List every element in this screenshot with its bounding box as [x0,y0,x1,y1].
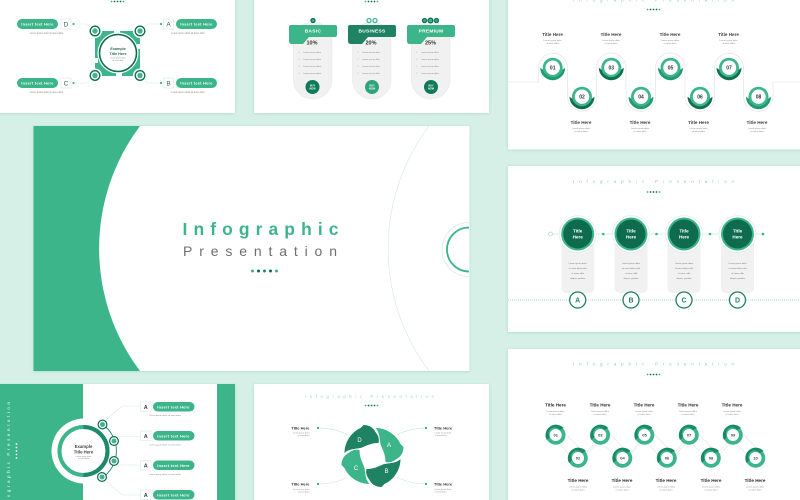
step 01: 01 [550,65,556,71]
step 02: 02 [576,456,581,460]
step C: Here [679,234,690,240]
wave line [508,53,800,111]
pricing card: premium: Lorem ipsum dolor [421,72,439,75]
central octagon diagram: Lorem ipsum dolor [110,56,126,60]
step 07: 07 [726,65,732,71]
list item 1: Insert text Here [157,405,190,409]
wave lower labels: Lorem ipsum dolor [572,127,590,130]
step A [559,216,596,308]
pricing card: business: BUY [369,84,375,88]
wave upper labels [542,32,739,45]
pricing card: basic: Lorem ipsum dolor [303,72,321,75]
label top-left [291,426,310,437]
petal C [342,450,370,484]
item D: Lorem ipsum dolor sit amet dolor [30,32,63,35]
pricing card: business: NOW [369,88,376,90]
wave upper labels: Lorem ipsum dolor [602,39,620,42]
step 05 [658,58,683,80]
zigzag lower labels: sit amet dolor [659,488,673,492]
label top-right: sit amet dolor [434,434,447,437]
step C: sit amet dolor,nulla [675,267,694,270]
zigzag lower labels: sit amet dolor [571,488,585,492]
step C: Lorem ipsum dolor [675,262,693,265]
label bottom-right [434,482,453,494]
item C [17,78,75,94]
header dots [647,191,660,193]
pinwheel letters: D [357,438,362,444]
pricing card: basic: Lorem ipsum dolor [303,65,321,68]
list item 2 [140,431,194,446]
connector dots [317,427,427,485]
item C: Lorem ipsum dolor sit amet dolor [30,91,63,94]
zigzag lower labels: Title Here [701,478,722,483]
pricing card: premium: Lorem ipsum dolor [421,51,439,54]
zigzag upper labels: sit amet dolor [725,413,739,416]
list item 2: Insert text Here [157,434,190,438]
zigzag upper labels: Lorem ipsum dolor [679,410,697,413]
zigzag lower labels: Title Here [568,478,589,483]
zigzag upper labels: Lorem ipsum dolor [723,410,741,413]
step 01 [540,58,565,80]
central octagon diagram: Title Here [109,52,127,56]
pricing card: business [348,18,396,99]
list nodes [98,420,118,481]
panel: zigzag timeline 01-10 [508,349,800,500]
pricing card: premium: Lorem ipsum dolor [421,58,439,61]
pricing card: business: Lorem ipsum dolor [362,51,380,54]
list item 1: Lorem ipsum dolor sit amet dolor [149,414,181,417]
step B: aliquet, porttitor [623,277,639,280]
cover title: Infographic [182,219,339,239]
step 02: 02 [579,94,585,100]
wave lower labels: sit amet dolor [574,130,588,133]
step 09 [723,425,743,445]
list item 4: A [144,493,148,499]
zigzag upper labels: sit amet dolor [637,413,651,416]
zigzag lower labels [568,478,766,492]
step 08: 08 [756,94,761,100]
wave lower labels: Lorem ipsum dolor [689,127,708,130]
pricing card: basic: BUY [310,84,315,88]
vertical dots [16,443,17,459]
item B: Insert text Here [180,82,213,86]
wave upper labels: Title Here [542,32,563,37]
list item 4: Insert text Here [157,493,190,497]
cover subtitle: Presentation [183,243,337,259]
pinwheel letters: C [354,466,359,472]
pinwheel letters: B [384,469,389,475]
pricing card: premium: BUY [428,84,434,88]
zigzag upper labels: Title Here [545,402,566,408]
zigzag upper labels: sit amet dolor [681,413,695,416]
zigzag lower labels: Lorem ipsum dolor [569,486,587,488]
step D: ut natus nibh [731,272,745,275]
connector line [552,233,765,235]
header title: Infographic Presentation [573,362,734,366]
step 09: 09 [731,432,736,438]
wave lower labels: sit amet dolor [750,130,764,133]
step A: ut natus nibh [571,272,585,275]
pricing card: basic: NOW [309,88,316,90]
wave upper labels: Lorem ipsum dolor [719,39,738,42]
zigzag lower labels: Lorem ipsum dolor [613,486,631,488]
step C: Title [679,228,689,234]
step 04: 04 [638,94,644,100]
step A: A [575,298,580,304]
step B [612,216,650,308]
panel: main cover slide [34,126,470,371]
step 07 [716,58,742,80]
wave upper labels: sit amet dolor [604,42,618,45]
step 10 [745,448,765,468]
pricing card: business: BUSINESS [359,28,386,34]
item C: Insert text Here [21,82,54,86]
pricing card: basic: 10% [306,40,318,46]
item D: Insert text Here [21,22,54,26]
wave lower labels: Title Here [688,120,709,125]
step 07 [679,425,699,445]
header title: Infographic Presentation [305,394,434,399]
central circle: Title Here [74,450,94,454]
list item 3 [140,460,194,476]
step A: Lorem ipsum dolor [569,262,587,265]
wave lower labels: Lorem ipsum dolor [748,127,766,130]
zigzag lower labels: sit amet dolor [615,488,629,492]
step B: Title [626,228,636,234]
label top-left: Title Here [291,426,310,430]
list item 3: A [144,463,148,469]
panel: pinwheel diagram [254,384,489,500]
wave lower labels: Title Here [571,120,592,125]
zigzag lower labels: Lorem ipsum dolor [746,486,764,488]
cover dots [251,270,278,272]
step C: aliquet, porttitor [676,277,692,280]
connectors [106,406,140,495]
curved connectors [318,428,426,484]
step 01: 01 [553,432,559,438]
step 08 [701,448,721,468]
label bottom-right: Lorem ipsum dolor [434,489,451,491]
central octagon diagram: sit amet dolor [112,59,124,62]
list item 1: A [144,405,148,411]
step 03: 03 [598,432,603,438]
step 07: 07 [687,432,692,438]
zigzag lower labels: Lorem ipsum dolor [657,486,675,488]
pricing card: business: 20% [365,40,377,46]
connectors [74,24,160,83]
wave upper labels: Title Here [718,32,739,37]
item A [160,19,217,35]
header title: Infographic Presentation [573,179,734,184]
list item 3: Lorem ipsum dolor sit amet dolor [149,473,181,476]
pricing card: basic: BASIC [305,28,321,34]
green side bands [0,384,235,500]
ring at right edge [442,222,469,276]
wave lower labels: sit amet dolor [633,130,647,133]
wave upper labels: Title Here [660,32,681,37]
wave lower labels: Lorem ipsum dolor [631,127,649,130]
header dots [365,405,378,406]
item B: B [166,80,171,87]
zigzag upper labels: Title Here [634,402,655,408]
label bottom-left [291,482,310,494]
step 05: 05 [642,432,647,438]
step 10: 10 [753,456,758,460]
zigzag upper labels [545,402,743,416]
header dots [111,1,124,2]
header dots [365,1,378,2]
item A: Lorem ipsum dolor sit amet dolor [171,32,205,35]
central circle: Example [75,444,93,449]
wave lower labels: Title Here [630,120,651,125]
list item 3: Insert text Here [157,464,190,468]
central octagon diagram: Example [110,47,126,51]
step 05 [634,425,654,445]
zigzag lower labels: Lorem ipsum dolor [702,486,720,488]
step D: Title [733,228,743,234]
step 03 [590,425,610,445]
petal A [376,428,404,462]
list item 2: Lorem ipsum dolor sit amet dolor [149,444,181,446]
wave lower labels: Title Here [747,120,768,125]
pricing card: premium: 25% [425,40,436,46]
item B [160,78,217,94]
pricing card: business: Lorem ipsum dolor [362,72,380,75]
step D: sit amet dolor,nulla [728,267,747,270]
dotted base line [508,299,800,301]
pricing card: premium: Lorem ipsum dolor [421,65,439,68]
step D [719,216,756,308]
step A: Title [573,228,583,234]
pricing card: business: Lorem ipsum dolor [362,65,380,68]
step 05: 05 [668,65,673,71]
label bottom-left: Lorem ipsum dolor [293,489,310,491]
pricing card: basic: Lorem ipsum dolor [303,51,321,54]
zigzag upper labels: Lorem ipsum dolor [591,410,609,413]
step 04 [612,448,632,468]
green curved side panel [34,126,140,371]
zigzag lower labels: sit amet dolor [704,488,718,492]
wave lower labels: sit amet dolor [692,130,705,133]
label top-right: Lorem ipsum dolor [434,432,451,434]
zigzag lower labels: sit amet dolor [748,488,762,492]
label bottom-left: Title Here [291,482,310,486]
panel: pricing tables [254,0,489,113]
wave upper labels: Lorem ipsum dolor [543,39,562,42]
zigzag upper labels: Lorem ipsum dolor [546,410,565,413]
pinwheel letters [354,438,391,475]
panel: circular list slide [0,384,235,500]
zigzag lines [556,430,762,464]
pricing card: premium [407,18,455,99]
zigzag lower labels: Title Here [745,478,766,483]
step B: B [628,298,634,304]
central circle: sit amet dolor [78,457,90,460]
step 06 [688,87,712,109]
step B: sit amet dolor,nulla [622,267,641,270]
petal D [344,425,379,453]
label bottom-left: sit amet dolor [297,490,310,494]
wave upper labels: sit amet dolor [722,42,735,45]
item C: C [64,80,69,87]
wave upper labels: sit amet dolor [663,42,677,45]
pricing card: business: Lorem ipsum dolor [362,58,380,61]
list item 4 [140,490,194,500]
label top-left: sit amet dolor [297,434,310,437]
petal B [366,459,400,487]
step D: aliquet, porttitor [730,277,745,280]
connector dots [602,233,764,235]
panel: four-corner diagram [0,0,235,113]
item A: A [166,21,171,28]
header dots [647,9,660,10]
zigzag upper labels: Lorem ipsum dolor [635,410,653,413]
zigzag lower labels: Title Here [612,478,633,483]
pinwheel hub [361,444,384,468]
panel: wave timeline 01-08 [508,0,800,150]
label bottom-right: Title Here [434,482,453,486]
zigzag upper labels: Title Here [590,402,611,408]
step 08 [746,87,771,109]
item A: Insert text Here [180,22,213,26]
step D: D [735,298,740,304]
step C: C [681,298,687,304]
step B: Lorem ipsum dolor [622,262,640,265]
header dots [647,374,660,375]
pricing card: basic [289,18,337,99]
step A: Here [573,234,583,240]
label top-right [434,426,453,437]
step 03: 03 [609,65,614,71]
list item 2: A [144,434,148,440]
label top-right: Title Here [434,426,453,430]
step 06: 06 [665,456,670,460]
step A: sit amet dolor,nulla [569,267,588,270]
step B: Here [626,234,637,240]
label bottom-right: sit amet dolor [434,490,447,494]
pinwheel letters: A [387,443,391,449]
step B: ut natus nibh [625,272,638,275]
step 06: 06 [697,94,703,100]
step A: aliquet, porttitor [570,277,586,280]
step 02 [570,87,594,109]
central octagon diagram [94,30,141,77]
item D: D [64,21,69,28]
zigzag upper labels: sit amet dolor [593,413,607,416]
panel: four-step ABCD timeline [508,166,800,332]
zigzag upper labels: Title Here [722,402,743,408]
step 01 [546,425,566,445]
zigzag lower labels: Title Here [656,478,677,483]
wave lower labels [571,120,768,133]
list item 1 [140,402,194,417]
zigzag upper labels: Title Here [678,402,699,408]
wave upper labels: sit amet dolor [546,42,559,45]
label top-left: Lorem ipsum dolor [293,432,310,434]
step D: Lorem ipsum dolor [728,262,747,265]
step 03 [599,58,624,80]
pricing card: premium: PREMIUM [419,28,443,34]
wave upper labels: Lorem ipsum dolor [661,39,679,42]
step 02 [568,448,588,468]
step 08: 08 [709,456,714,460]
thin decorative arc [388,126,429,371]
step C: ut natus nibh [678,272,691,275]
zigzag upper labels: sit amet dolor [549,413,562,416]
central circle: Lorem ipsum dolor [76,455,92,458]
step D: Here [732,234,743,240]
pricing card: premium: NOW [428,88,435,90]
step C [666,216,702,308]
corner nodes [88,24,147,82]
wave upper labels: Title Here [601,32,622,37]
central circle [52,418,116,484]
step 04: 04 [620,456,625,460]
step 04 [628,87,654,109]
step 06 [657,448,677,468]
item D [17,19,75,35]
pricing card: basic: Lorem ipsum dolor [303,58,321,61]
item B: Lorem ipsum dolor sit amet dolor [171,91,205,94]
